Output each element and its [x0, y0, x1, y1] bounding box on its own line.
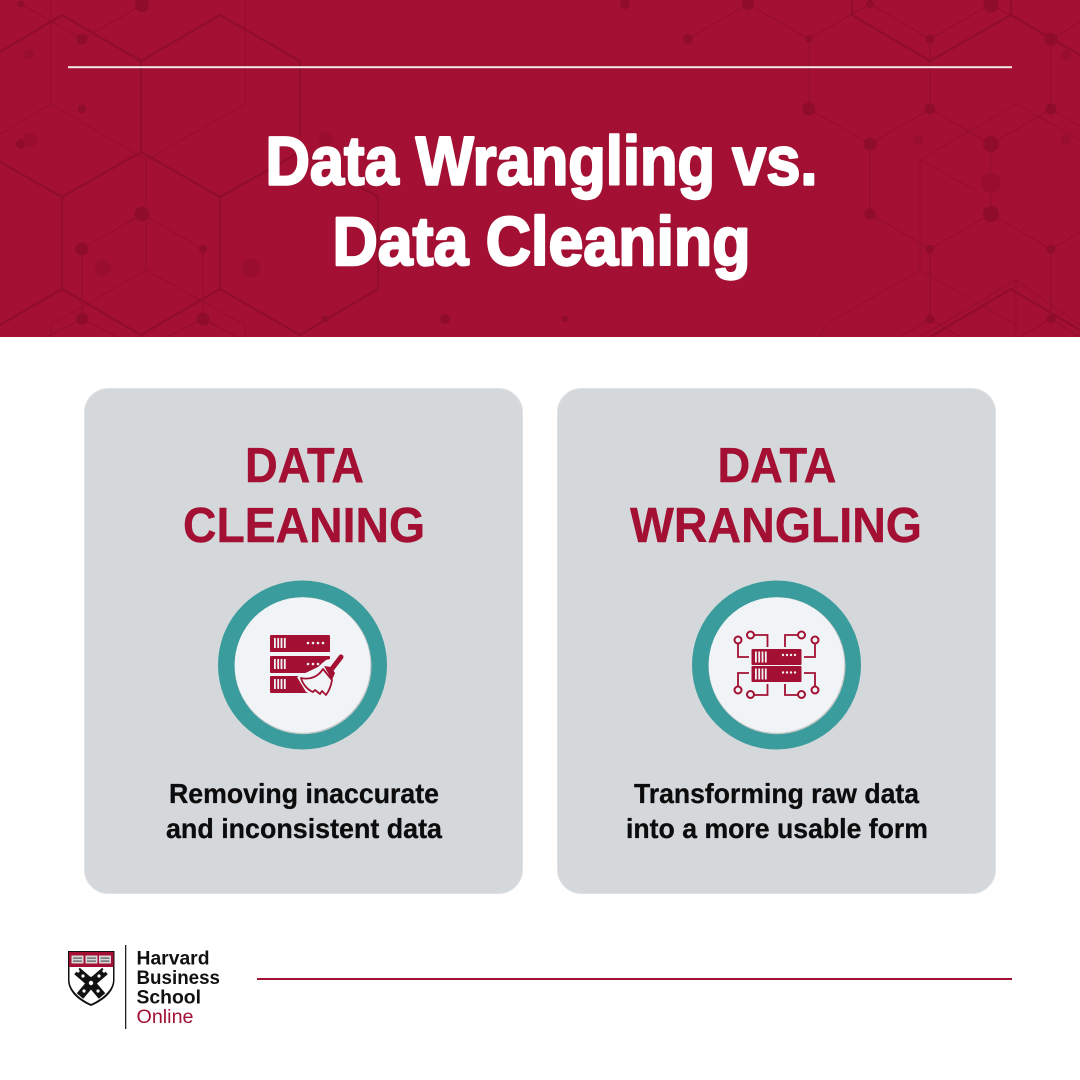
- background pattern: faint dots: [23, 49, 1071, 278]
- top rule: [68, 66, 1012, 68]
- title: Data Cleaning: [332, 203, 750, 280]
- description: data wrangling: Transforming raw data: [634, 778, 919, 809]
- logo divider: [125, 945, 126, 1029]
- heading: data cleaning: DATA: [245, 439, 364, 493]
- panel: data wrangling: [558, 388, 996, 894]
- broom: [297, 655, 347, 698]
- icon: shield: [68, 951, 114, 1006]
- logo: Harvard Business School Online: [68, 945, 220, 1029]
- server stack: [270, 635, 330, 693]
- wordmark: [136, 948, 220, 1028]
- title: Data Wrangling vs.: [266, 122, 818, 200]
- heading: data wrangling: [630, 439, 922, 553]
- icon: server with circuit lines: [692, 580, 861, 750]
- heading: data cleaning: [183, 439, 425, 553]
- servers: [752, 649, 802, 682]
- wordmark: Harvard: [136, 948, 210, 970]
- description: data cleaning: and inconsistent data: [166, 813, 442, 844]
- panel: data cleaning: [84, 388, 522, 894]
- wordmark: Business: [136, 968, 220, 989]
- circuit traces: [734, 632, 818, 698]
- title: [266, 122, 818, 280]
- heading: data wrangling: WRANGLING: [630, 499, 922, 553]
- icon: server with broom: [218, 580, 387, 750]
- wordmark: School: [136, 988, 201, 1008]
- footer rule: [257, 978, 1012, 980]
- description: data wrangling: [626, 778, 928, 844]
- background pattern: thin network lines: [21, 4, 1080, 350]
- description: data wrangling: into a more usable form: [626, 813, 928, 844]
- description: data cleaning: [166, 778, 442, 844]
- background pattern: faint hexagons: [0, 0, 1080, 337]
- heading: data cleaning: CLEANING: [183, 499, 425, 553]
- header banner: [0, 0, 1080, 350]
- background pattern: network nodes: [16, 0, 1058, 326]
- background pattern: thick hexagon outlines: [0, 0, 1080, 337]
- wordmark: Online: [136, 1007, 194, 1028]
- heading: data wrangling: DATA: [718, 439, 836, 493]
- description: data cleaning: Removing inaccurate: [169, 778, 439, 809]
